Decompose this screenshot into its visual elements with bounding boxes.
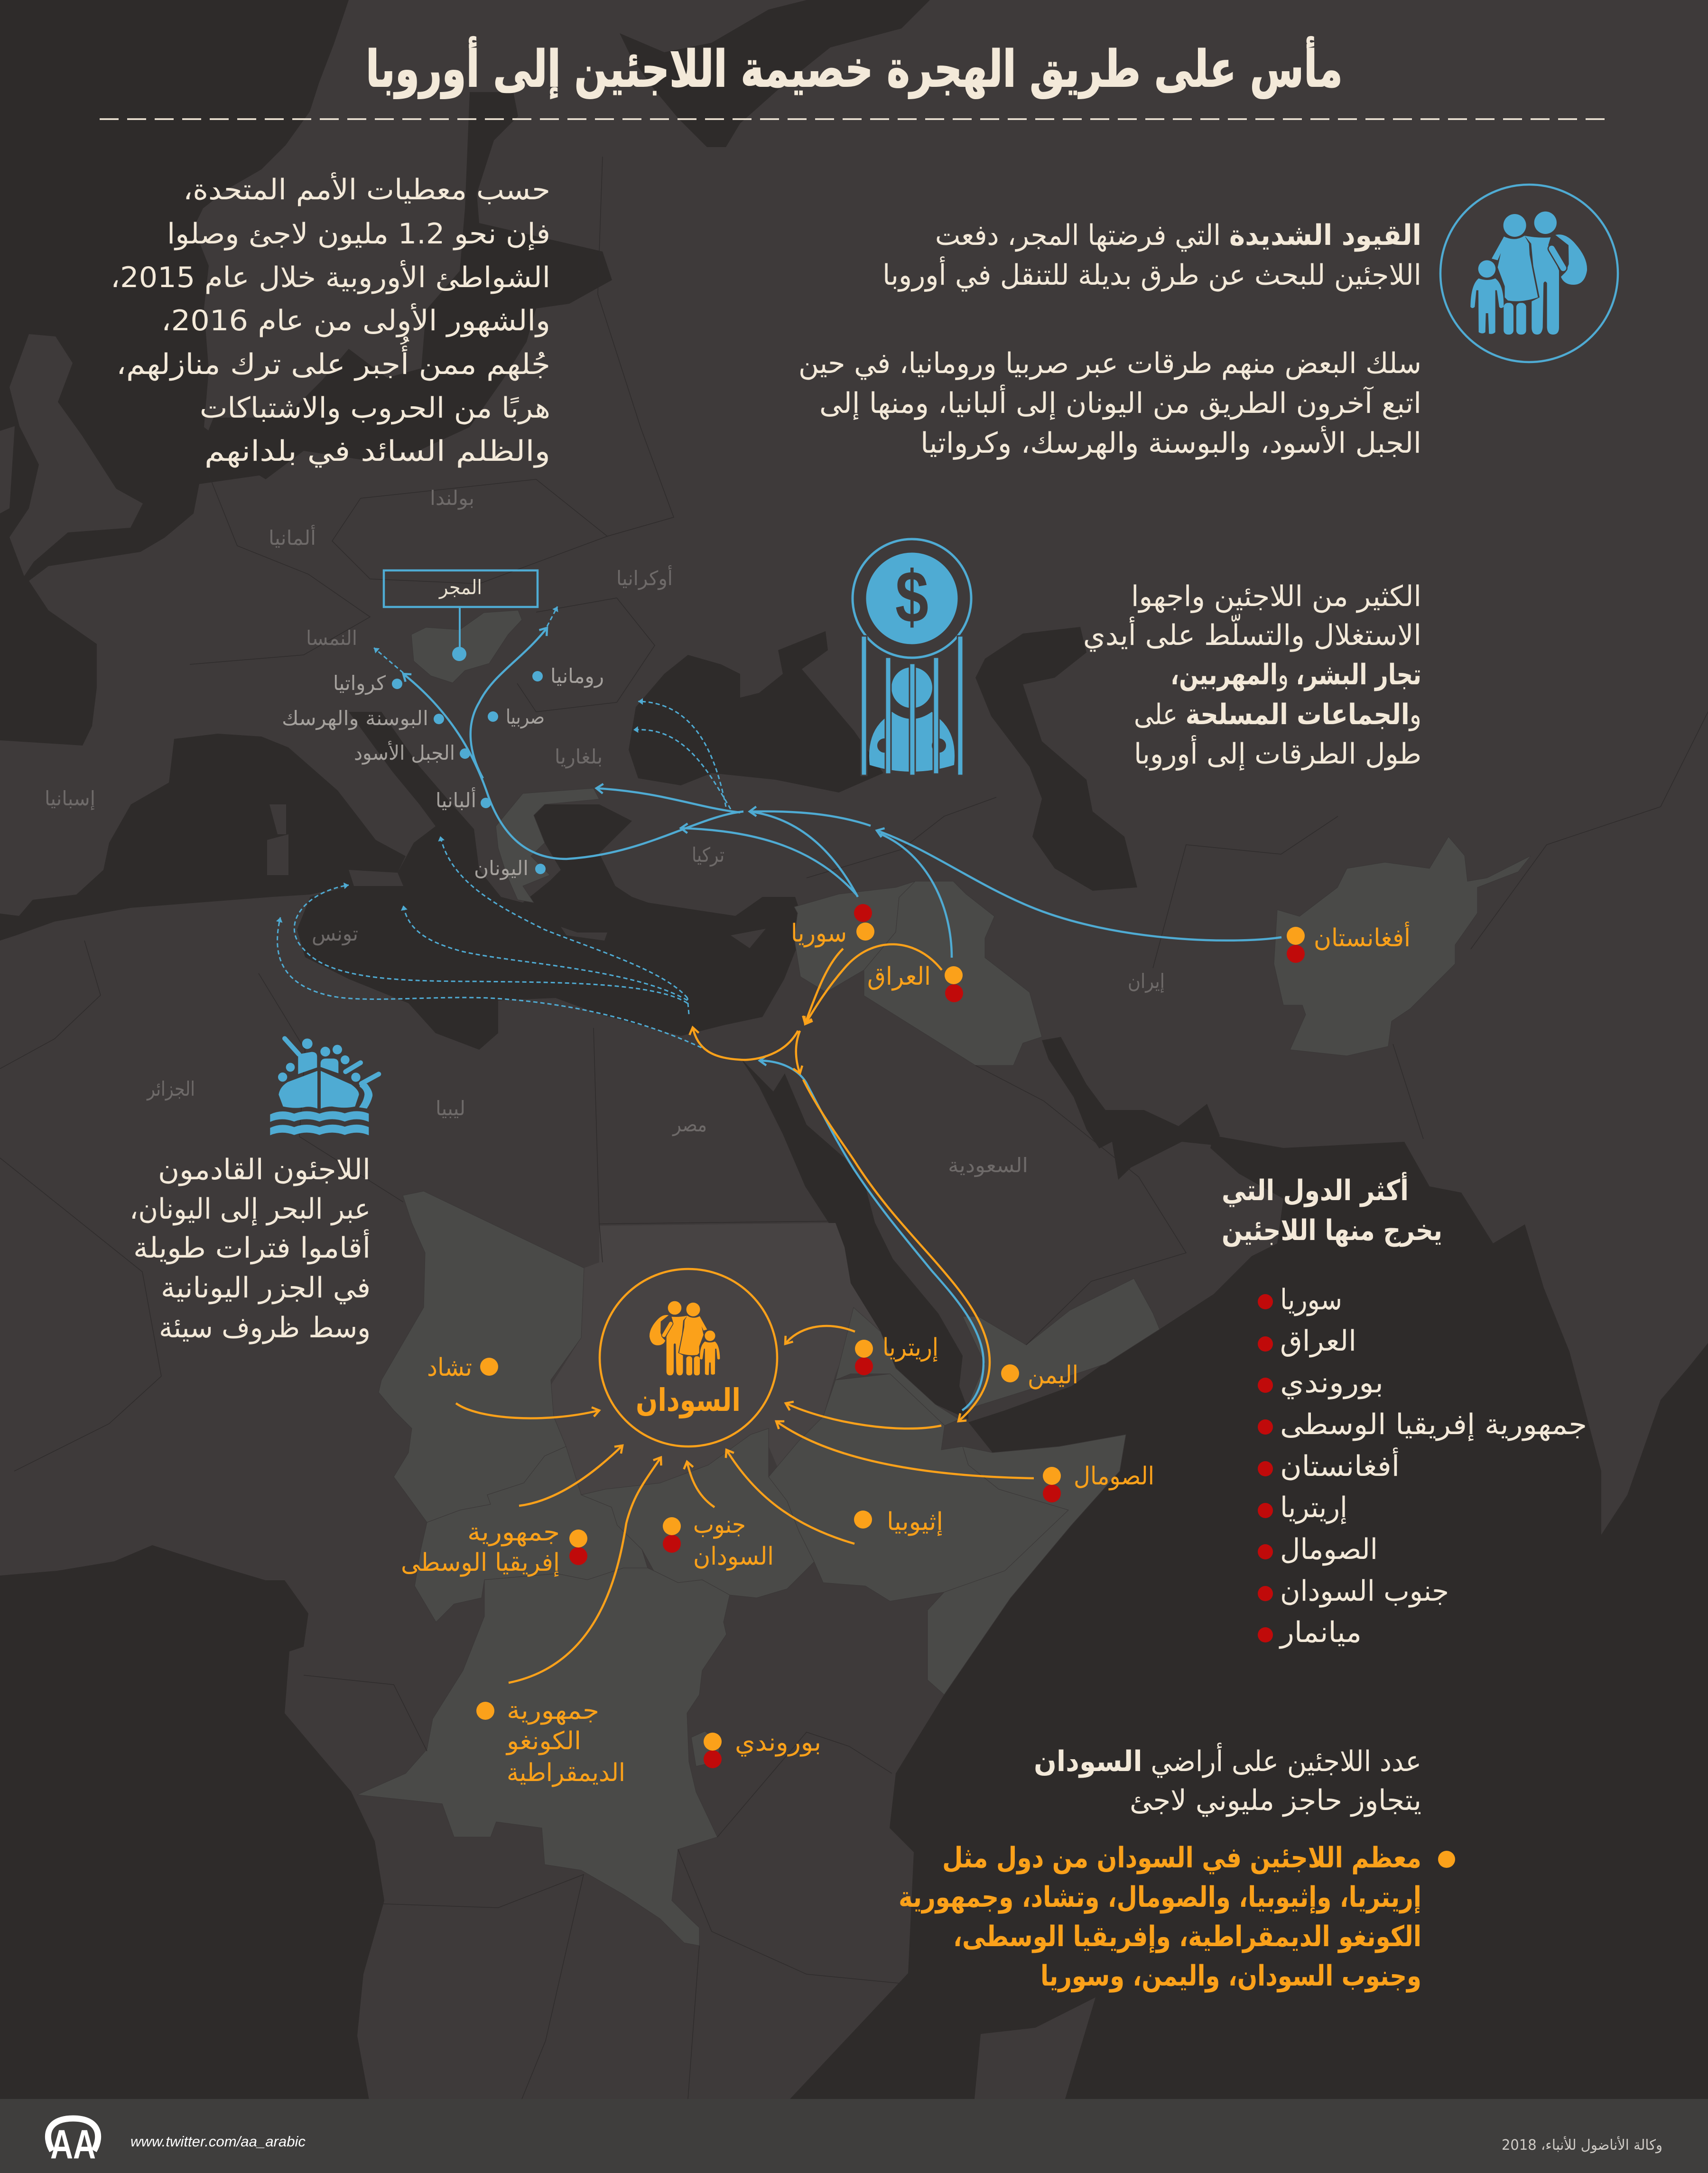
text block: refugees arriving by sea: عبر البحر إلى اليونان،	[130, 1193, 371, 1226]
text block: refugees in Sudan: يتجاوز حاجز مليوني لاجئ	[1130, 1784, 1421, 1817]
map labels: Balkan route countries: صربيا	[506, 705, 545, 728]
title: مأس على طريق الهجرة خصيمة اللاجئين إلى أوروبا	[366, 37, 1343, 99]
list: top refugee origin countries: يخرج منها اللاجئين	[1222, 1214, 1442, 1247]
label box: Hungary: المجر	[438, 576, 482, 599]
text block: UN figures: الشواطئ الأوروبية خلال عام 2015،	[111, 260, 550, 294]
icon: blue family in circle	[1440, 185, 1618, 362]
text block: exploitation by traffickers: الكثير من اللاجئين واجهوا	[1131, 580, 1421, 613]
list: top refugee origin countries: أفغانستان	[1280, 1447, 1400, 1483]
text block: restrictions imposed by Hungary: اللاجئين للبحث عن طرق بديلة للتنقل في أوروبا	[882, 256, 1421, 292]
map labels: origin countries: أفغانستان	[1314, 922, 1411, 952]
arrows: orange routes to Egypt and Red Sea	[693, 944, 990, 1421]
map labels: neighbouring countries: النمسا	[306, 626, 357, 650]
map labels: Balkan route countries: الجبل الأسود	[354, 740, 455, 765]
map labels: origin countries: إفريقيا الوسطى	[401, 1548, 560, 1577]
list: top refugee origin countries: أكثر الدول التي	[1222, 1172, 1409, 1207]
list: top refugee origin countries: جنوب السودان	[1280, 1575, 1449, 1608]
map labels: Balkan route countries: كرواتيا	[333, 671, 386, 695]
map labels: Balkan route countries	[282, 664, 604, 880]
footer: www.twitter.com/aa_arabic	[130, 2133, 306, 2150]
text block: exploitation by traffickers	[1083, 580, 1421, 771]
text block: exploitation by traffickers: طول الطرقات إلى أوروبا	[1134, 735, 1421, 771]
arrows: blue dashed sea routes	[278, 606, 731, 1051]
map labels: origin countries: الكونغو	[505, 1727, 581, 1755]
text block: UN figures: حسب معطيات الأمم المتحدة،	[183, 172, 550, 206]
map labels: origin countries: تشاد	[427, 1353, 472, 1382]
map labels: origin countries: جنوب	[693, 1511, 746, 1539]
label box: Hungary	[384, 570, 538, 661]
map labels: origin countries: جمهورية	[467, 1518, 560, 1547]
list: top refugee origin countries: العراق	[1280, 1324, 1356, 1358]
text block: refugees in Sudan: عدد اللاجئين على أراضي السودان	[1034, 1743, 1421, 1778]
text block: exploitation by traffickers: الاستغلال والتسلّط على أيدي	[1083, 614, 1421, 652]
map labels: neighbouring countries: الجزائر	[146, 1077, 195, 1100]
map labels: origin countries: بوروندي	[735, 1728, 821, 1757]
callout: origin of refugees in Sudan: معظم اللاجئين في السودان من دول مثل	[942, 1841, 1421, 1875]
text block: UN figures: والظلم السائد في بلدانهم	[204, 435, 550, 468]
text block: exploitation by traffickers: تجار البشر، والمهربين،	[1170, 658, 1421, 691]
circle: Sudan with family icon: السودان	[636, 1382, 741, 1419]
map labels: neighbouring countries: أوكرانيا	[616, 565, 673, 590]
map labels: neighbouring countries: إيران	[1128, 970, 1165, 993]
map labels: origin countries: العراق	[867, 962, 931, 991]
callout: origin of refugees in Sudan: إريتريا، وإثيوبيا، والصومال، وتشاد، وجمهورية	[899, 1881, 1421, 1914]
text block: UN figures: والشهور الأولى من عام 2016،	[161, 303, 550, 337]
logo: Anadolu Agency: AA	[50, 2122, 96, 2167]
map labels: Balkan route countries: البوسنة والهرسك	[282, 707, 428, 730]
list: top refugee origin countries: ميانمار	[1279, 1616, 1362, 1649]
map: highlighted countries	[357, 610, 1531, 1946]
text block: refugees arriving by sea: في الجزر اليونانية	[161, 1271, 371, 1305]
map labels: neighbouring countries: إسبانيا	[45, 787, 95, 811]
map labels: origin countries: الصومال	[1074, 1462, 1154, 1491]
text block: restrictions imposed by Hungary: القيود الشديدة التي فرضتها المجر، دفعت	[935, 219, 1421, 252]
map labels: Balkan route countries: اليونان	[474, 857, 529, 880]
list: top refugee origin countries	[1222, 1172, 1587, 1649]
footer: وكالة الأناضول للأنباء، 2018	[1502, 2136, 1662, 2154]
arrows: orange routes into Sudan	[456, 1326, 1034, 1683]
text block: UN figures: فإن نحو 1.2 مليون لاجئ وصلوا	[167, 217, 550, 251]
map labels: origin countries: السودان	[693, 1542, 774, 1571]
callout: origin of refugees in Sudan	[899, 1841, 1455, 1993]
text block: restrictions imposed by Hungary: الجبل الأسود، والبوسنة والهرسك، وكرواتيا	[920, 426, 1421, 460]
arrows: blue land routes to Europe	[403, 628, 1281, 1410]
list: top refugee origin countries: جمهورية إفريقيا الوسطى	[1280, 1408, 1587, 1441]
text block: UN figures	[111, 172, 550, 468]
map labels: Balkan route countries: رومانيا	[550, 664, 604, 688]
map labels: origin countries	[401, 919, 1411, 1787]
text block: exploitation by traffickers: والجماعات المسلحة على	[1134, 698, 1421, 731]
callout: origin of refugees in Sudan: الكونغو الديمقراطية، وإفريقيا الوسطى،	[953, 1920, 1421, 1953]
map labels: neighbouring countries: بولندا	[430, 486, 474, 510]
map labels: neighbouring countries: تونس	[312, 922, 358, 945]
text block: refugees arriving by sea: وسط ظروف سيئة	[159, 1311, 371, 1344]
map: islands and land over water	[0, 334, 1095, 2099]
text block: restrictions imposed by Hungary	[798, 219, 1421, 460]
map labels: Balkan route countries: ألبانيا	[436, 787, 476, 812]
list: top refugee origin countries: إريتريا	[1280, 1491, 1347, 1524]
map labels: origin countries: الديمقراطية	[507, 1759, 625, 1787]
list: top refugee origin countries: بوروندي	[1280, 1366, 1383, 1399]
map labels: origin countries: إريتريا	[882, 1334, 938, 1362]
text block: refugees in Sudan	[1034, 1743, 1421, 1817]
text block: refugees arriving by sea	[130, 1153, 371, 1344]
text block: UN figures: هربًا من الحروب والاشتباكات	[200, 392, 550, 425]
text block: restrictions imposed by Hungary: سلك البعض منهم طرقات عبر صربيا ورومانيا، في حين	[798, 347, 1421, 380]
map labels: neighbouring countries: ألمانيا	[269, 525, 316, 550]
map labels: origin countries: إثيوبيا	[887, 1508, 943, 1536]
map labels: origin countries: سوريا	[791, 919, 847, 948]
map labels: neighbouring countries: تركيا	[692, 843, 724, 867]
icon: money and person behind bars: $	[895, 556, 928, 638]
map labels: neighbouring countries: مصر	[672, 1113, 707, 1136]
map labels: neighbouring countries: ليبيا	[436, 1097, 465, 1120]
map labels: origin countries: اليمن	[1028, 1361, 1078, 1390]
map labels: neighbouring countries: بلغاريا	[555, 745, 603, 768]
map labels: neighbouring countries	[45, 486, 1165, 1177]
icon: boat with refugees	[270, 1038, 379, 1135]
text block: restrictions imposed by Hungary: اتبع آخرون الطريق من اليونان إلى ألبانيا، ومنها إلى	[819, 384, 1421, 420]
text block: UN figures: جُلهم ممن أُجبر على ترك منازلهم،	[116, 337, 550, 381]
callout: origin of refugees in Sudan: وجنوب السودان، واليمن، وسوريا	[1040, 1959, 1421, 1993]
icon: money and person behind bars	[853, 539, 971, 775]
text block: refugees arriving by sea: اللاجئون القادمون	[158, 1153, 371, 1186]
circle: Sudan with family icon	[600, 1269, 777, 1446]
list: top refugee origin countries: سوريا	[1280, 1283, 1342, 1316]
footer	[0, 2099, 1708, 2173]
map labels: neighbouring countries: السعودية	[948, 1154, 1028, 1177]
list: top refugee origin countries: الصومال	[1280, 1533, 1378, 1566]
map markers: origin countries	[476, 904, 1305, 1768]
map: Sudan territory	[551, 1223, 881, 1495]
text block: refugees arriving by sea: أقاموا فترات طويلة	[133, 1229, 371, 1265]
map labels: origin countries: جمهورية	[507, 1697, 599, 1725]
